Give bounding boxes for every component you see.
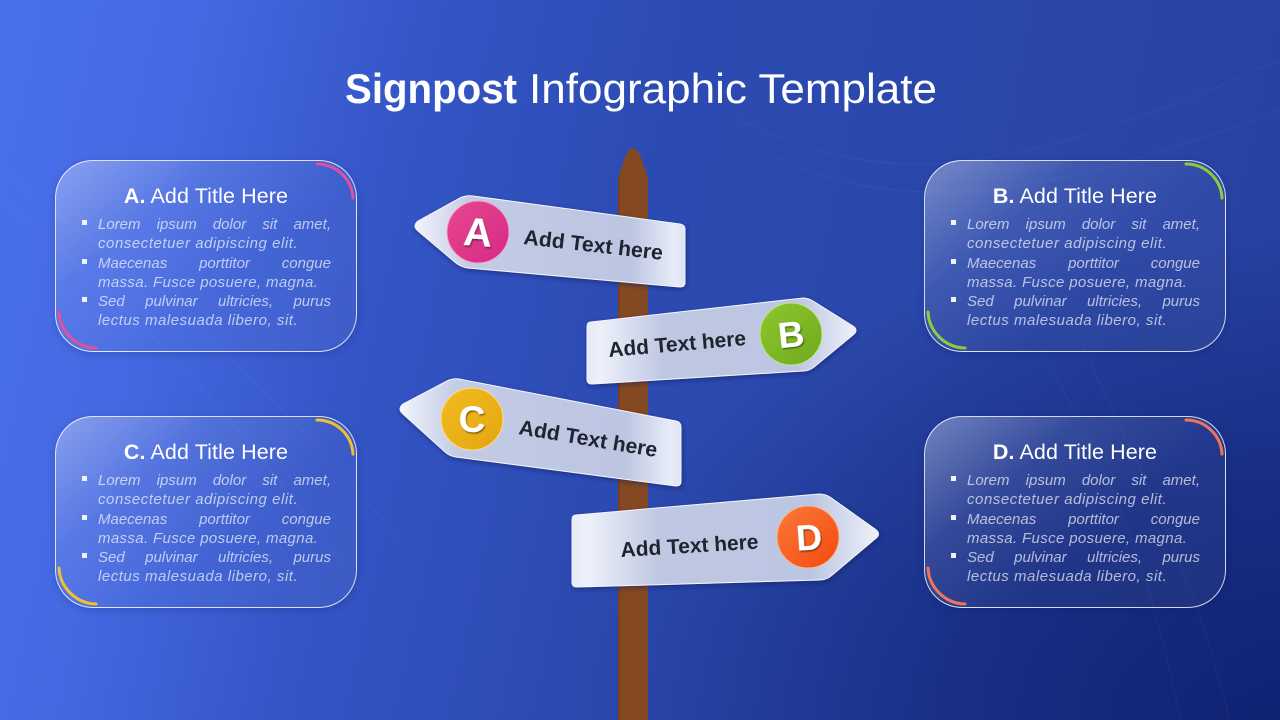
bullet list B: ipsum bbox=[1026, 216, 1066, 233]
heading D: D. Add Title Here bbox=[993, 440, 1157, 464]
bullet list C: lectus malesuada libero, sit. bbox=[98, 568, 298, 585]
corner accents B bbox=[926, 162, 1224, 350]
bullet list A: pulvinar bbox=[145, 293, 198, 310]
corner accents D bbox=[926, 418, 1224, 606]
bullet list C: ipsum bbox=[157, 472, 197, 489]
label D: Add Text here bbox=[620, 531, 759, 562]
bullet list C bbox=[82, 472, 331, 585]
title: Infographic Template bbox=[529, 65, 937, 112]
bullet list C: pulvinar bbox=[145, 549, 198, 566]
badge D: D bbox=[795, 516, 823, 559]
sign A bbox=[415, 196, 685, 287]
bullet list A: congue bbox=[282, 255, 331, 272]
sign C bbox=[400, 379, 681, 486]
badge C: C bbox=[459, 399, 485, 440]
bullet list A: ipsum bbox=[157, 216, 197, 233]
bullet list A: porttitor bbox=[199, 255, 250, 272]
bullet list A: massa. Fusce posuere, magna. bbox=[98, 274, 318, 291]
bullet list B: congue bbox=[1151, 255, 1200, 272]
label C: Add Text here bbox=[517, 416, 659, 462]
bullet list C: porttitor bbox=[199, 511, 250, 528]
bullet list D: Lorem bbox=[967, 472, 1010, 489]
bullet list B: consectetuer adipiscing elit. bbox=[967, 235, 1167, 252]
panel: B bbox=[924, 160, 1226, 352]
bullet list A: ultricies, bbox=[218, 293, 273, 310]
sign B bbox=[587, 298, 856, 384]
bullet list A: dolor bbox=[213, 216, 246, 233]
corner accents C bbox=[58, 418, 354, 606]
bullet list B: Lorem bbox=[967, 216, 1010, 233]
bullet list D: amet, bbox=[1162, 472, 1200, 489]
badge A bbox=[447, 201, 509, 263]
bullet list B: pulvinar bbox=[1014, 293, 1067, 310]
bullet list C: Sed bbox=[98, 549, 125, 566]
bullet list C: Lorem bbox=[98, 472, 141, 489]
bullet list B: Maecenas bbox=[967, 255, 1036, 272]
bullet list C: consectetuer adipiscing elit. bbox=[98, 491, 298, 508]
bullet list B: sit bbox=[1131, 216, 1146, 233]
bullet list D: dolor bbox=[1082, 472, 1115, 489]
title: Signpost bbox=[345, 65, 517, 112]
bullet list B: lectus malesuada libero, sit. bbox=[967, 312, 1167, 329]
bullet list C: sit bbox=[262, 472, 277, 489]
bullet list D: lectus malesuada libero, sit. bbox=[967, 568, 1167, 585]
bullet list C: amet, bbox=[293, 472, 331, 489]
bullet list C: congue bbox=[282, 511, 331, 528]
bullet list C: ultricies, bbox=[218, 549, 273, 566]
label A: Add Text here bbox=[522, 226, 664, 265]
sign D bbox=[572, 494, 878, 587]
bullet list B: dolor bbox=[1082, 216, 1115, 233]
bullet list B: porttitor bbox=[1068, 255, 1119, 272]
bullet list D: congue bbox=[1151, 511, 1200, 528]
panel: D bbox=[924, 416, 1226, 608]
label B: Add Text here bbox=[607, 327, 747, 362]
bullet list D: Maecenas bbox=[967, 511, 1036, 528]
bullet list D: consectetuer adipiscing elit. bbox=[967, 491, 1167, 508]
bullet list B: ultricies, bbox=[1087, 293, 1142, 310]
bullet list C: Maecenas bbox=[98, 511, 167, 528]
bullet list D: porttitor bbox=[1068, 511, 1119, 528]
badge B: B bbox=[776, 313, 806, 356]
bullet list A: consectetuer adipiscing elit. bbox=[98, 235, 298, 252]
bullet list D: purus bbox=[1162, 549, 1200, 566]
bullet list A: Maecenas bbox=[98, 255, 167, 272]
bullet list D: ipsum bbox=[1026, 472, 1066, 489]
badge C bbox=[441, 388, 503, 450]
bullet list D: sit bbox=[1131, 472, 1146, 489]
panel: C bbox=[55, 416, 357, 608]
bullet list A: sit bbox=[262, 216, 277, 233]
bullet list B: amet, bbox=[1162, 216, 1200, 233]
bullet list C: dolor bbox=[213, 472, 246, 489]
bullet list D bbox=[951, 472, 1200, 585]
bullet list A: purus bbox=[293, 293, 331, 310]
bullet list A: amet, bbox=[293, 216, 331, 233]
bullet list D: Sed bbox=[967, 549, 994, 566]
wooden post bbox=[618, 148, 648, 720]
corner accents A bbox=[58, 162, 354, 350]
bullet list D: pulvinar bbox=[1014, 549, 1067, 566]
heading C: C. Add Title Here bbox=[124, 440, 288, 464]
badge A: A bbox=[462, 210, 494, 256]
bullet list C: purus bbox=[293, 549, 331, 566]
bullet list B: Sed bbox=[967, 293, 994, 310]
bullet list B: massa. Fusce posuere, magna. bbox=[967, 274, 1187, 291]
bullet list A bbox=[82, 216, 331, 329]
bullet list D: massa. Fusce posuere, magna. bbox=[967, 530, 1187, 547]
bullet list C: massa. Fusce posuere, magna. bbox=[98, 530, 318, 547]
bullet list A: Sed bbox=[98, 293, 125, 310]
panel: A bbox=[55, 160, 357, 352]
bullet list B: purus bbox=[1162, 293, 1200, 310]
bullet list D: ultricies, bbox=[1087, 549, 1142, 566]
bullet list A: Lorem bbox=[98, 216, 141, 233]
bullet list B bbox=[951, 216, 1200, 329]
badge D bbox=[777, 506, 839, 568]
badge B bbox=[760, 303, 822, 365]
bullet list A: lectus malesuada libero, sit. bbox=[98, 312, 298, 329]
heading B: B. Add Title Here bbox=[993, 184, 1157, 208]
heading A: A. Add Title Here bbox=[124, 184, 288, 208]
